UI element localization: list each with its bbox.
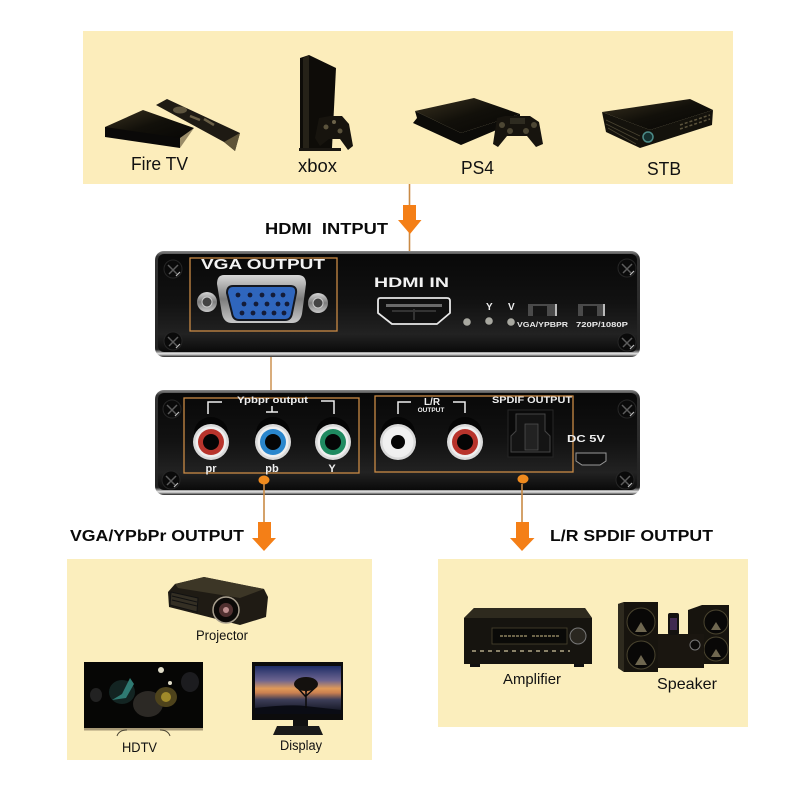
jack: L white xyxy=(380,417,416,460)
labels: Y V xyxy=(486,302,515,313)
screws: back panel xyxy=(162,400,636,489)
icon: HDTV xyxy=(84,662,203,736)
heading: HDMI INTPUT: HDMI INTPUT xyxy=(265,221,388,238)
icon: speaker system xyxy=(618,602,729,672)
label: Projector: Projector xyxy=(196,628,248,643)
labels: pr pb Y xyxy=(206,463,336,475)
screws: front panel xyxy=(164,259,636,351)
icon: xbox console and controller xyxy=(299,55,353,151)
panel: video outputs xyxy=(67,559,372,760)
switch: 720P/1080P xyxy=(576,304,628,329)
connector: VGA to YPbPr xyxy=(270,331,272,398)
label: Fire TV: Fire TV xyxy=(131,154,188,174)
label: VGA OUTPUT: VGA OUTPUT xyxy=(201,257,325,273)
labels: Y V: Y xyxy=(486,302,493,313)
label: PS4: PS4 xyxy=(461,158,494,178)
label: Speaker: Speaker xyxy=(657,676,718,693)
arrow: VGA/YPbPr output xyxy=(252,484,276,551)
label: Display: Display xyxy=(280,738,322,753)
jack: pb blue xyxy=(255,417,291,460)
labels: pr pb Y: pr xyxy=(206,463,217,475)
icon: set-top box xyxy=(602,99,713,148)
jack: R red xyxy=(447,417,483,460)
switch: VGA/YPbPr: VGA/YPBPR xyxy=(517,322,568,329)
label: L/R output: L/R xyxy=(424,397,441,408)
label: Amplifier: Amplifier xyxy=(503,671,561,688)
labels: Y V: V xyxy=(508,302,515,313)
icon: amplifier xyxy=(464,608,592,667)
icon: micro USB port xyxy=(576,453,606,465)
callout box: VGA output xyxy=(190,258,337,331)
label: xbox: xbox xyxy=(298,156,337,176)
icon: display monitor xyxy=(252,662,343,735)
indicator LEDs xyxy=(463,317,515,326)
jack: Y green xyxy=(315,417,351,460)
heading: VGA/YPbPr OUTPUT: VGA/YPbPr OUTPUT xyxy=(70,528,244,545)
callout box: L/R and SPDIF output xyxy=(375,396,573,472)
label: DC 5V: DC 5V xyxy=(567,433,605,445)
label: SPDIF OUTPUT: SPDIF OUTPUT xyxy=(492,395,572,406)
switch: 720P/1080P: 720P/1080P xyxy=(576,322,628,329)
switch: VGA/YPbPr xyxy=(517,304,568,329)
label: HDTV: HDTV xyxy=(122,739,158,755)
panel: converter front xyxy=(155,251,640,357)
callout box: YPbPr output xyxy=(184,398,359,473)
icon: Fire TV box and remote xyxy=(105,99,240,151)
icon: projector xyxy=(168,577,268,625)
dot: YPbPr callout xyxy=(258,476,270,484)
icon: VGA connector xyxy=(197,275,328,323)
label: Ypbpr output: Ypbpr output xyxy=(237,395,309,406)
arrow: L/R SPDIF output xyxy=(510,484,534,551)
arrow: HDMI input xyxy=(398,184,422,272)
icon: PS4 console and controller xyxy=(413,98,543,147)
panel: converter back xyxy=(155,390,640,495)
label: STB: STB xyxy=(647,159,681,179)
panel: audio outputs xyxy=(438,559,748,727)
label: L/R output xyxy=(418,397,444,414)
dot: SPDIF callout xyxy=(518,474,528,484)
icon: optical port xyxy=(508,410,553,457)
labels: pr pb Y: Y xyxy=(328,463,336,475)
label: HDMI IN: HDMI IN xyxy=(374,274,449,290)
heading: L/R SPDIF OUTPUT: L/R SPDIF OUTPUT xyxy=(550,528,713,545)
icon: HDMI port xyxy=(378,298,450,324)
brackets xyxy=(208,401,465,414)
label: L/R output: OUTPUT xyxy=(418,407,444,414)
labels: pr pb Y: pb xyxy=(265,463,279,475)
jack: pr red xyxy=(193,417,229,460)
panel: input sources xyxy=(83,31,733,184)
